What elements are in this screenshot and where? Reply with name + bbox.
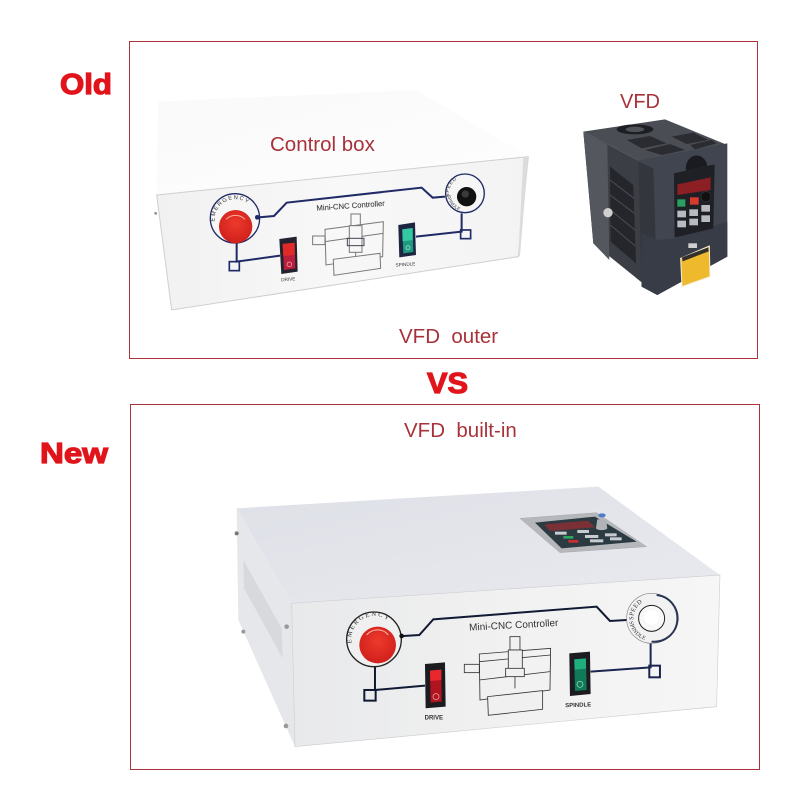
icon: speed knob: SPEED [446,178,456,197]
icon: emergency stop button [346,611,404,668]
icon: speed dial [626,593,679,644]
label: Control box: Control box [270,133,376,156]
icon: drive switch [425,662,446,721]
panel: new setup frame [130,404,760,770]
icon: cooling fan [617,124,653,134]
icon: built-in VFD control panel [520,513,647,553]
panel: old setup frame [130,42,758,358]
icon: CNC machine line drawing [464,637,551,715]
keypad [674,164,715,238]
icon: CNC machine line drawing [313,214,383,275]
icon: speed knob: SPINDLE [448,194,460,210]
label: VFD: VFD [620,91,660,113]
heading: New: New [40,438,108,470]
icon: spindle switch: SPINDLE [565,702,591,709]
new control box illustration [234,486,720,747]
icon: speed knob [445,173,485,214]
icon: drive switch [279,237,298,282]
wiring lines [403,607,627,636]
caution label [681,246,710,287]
label: VFD outer: VFD outer [399,325,498,348]
icon: drive switch: DRIVE [425,715,443,721]
old control box illustration [154,156,529,310]
icon: drive switch: DRIVE [281,276,296,282]
icon: spindle switch: SPINDLE [395,261,416,268]
label: Mini-CNC Controller: Mini-CNC Controller [469,618,559,634]
icon: speed dial: SPEED [629,600,642,620]
icon: emergency stop button: EMERGENCY [347,612,390,644]
icon: spindle switch [395,222,416,268]
label: VFD built-in: VFD built-in [404,419,517,442]
VFD unit illustration [583,119,727,295]
label: Mini-CNC Controller: Mini-CNC Controller [316,199,386,213]
icon: emergency stop button [210,193,260,244]
top vents [627,133,717,155]
icon: speed dial: SPINDLE [629,621,646,640]
heading: VS: VS [427,368,468,400]
heading: Old: Old [60,69,112,101]
icon: spindle switch [565,652,591,709]
side vents [610,167,636,263]
icon: emergency stop button: EMERGENCY [210,195,250,222]
lower body shading [642,222,727,295]
